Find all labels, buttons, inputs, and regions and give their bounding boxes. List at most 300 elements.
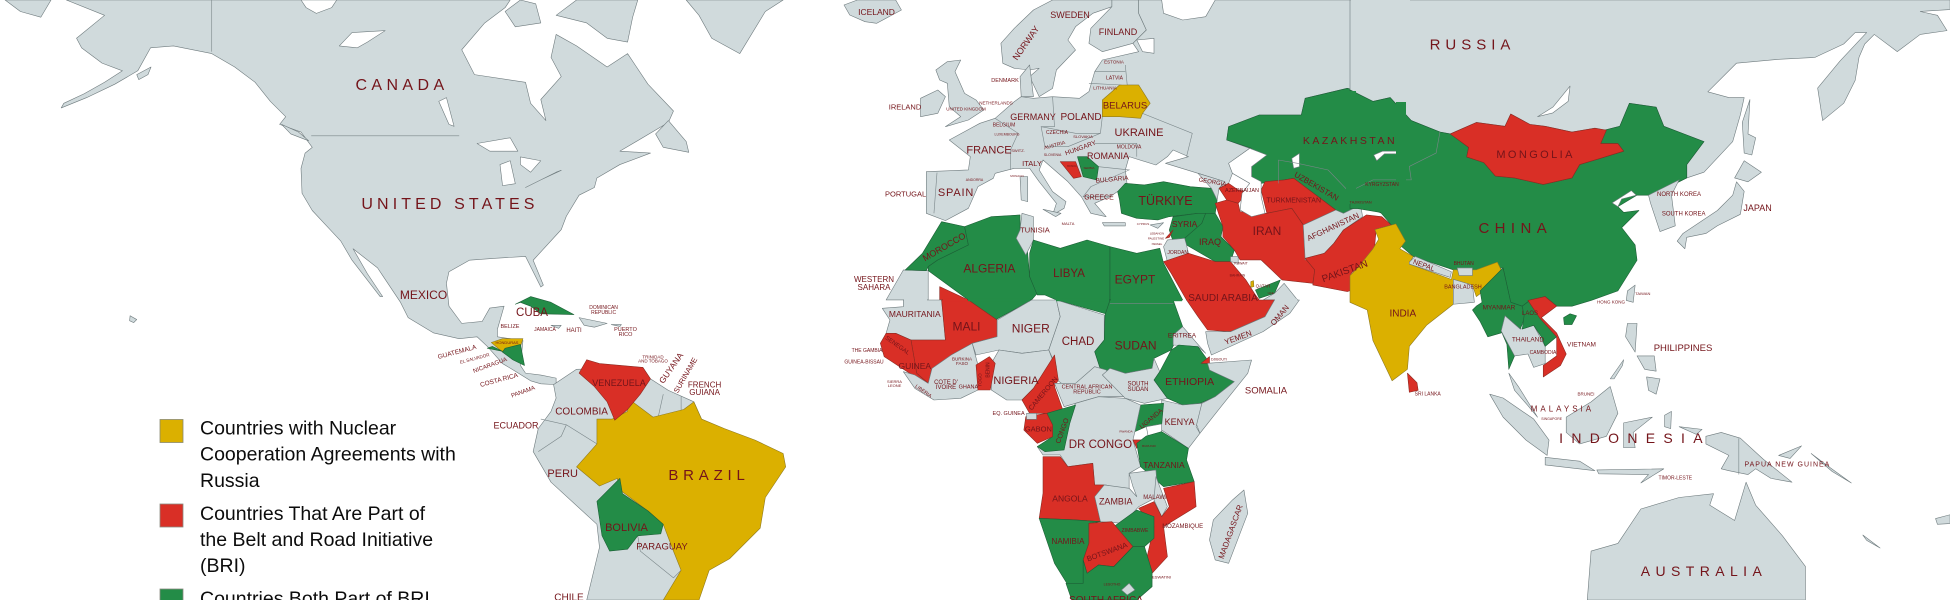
labels: Europe and Middle East: PALESTINE (1148, 236, 1164, 240)
labels: Asia and Oceania: SINGAPORE (1541, 417, 1563, 421)
island: Sicily (1043, 209, 1061, 217)
country: Mali (911, 300, 997, 383)
peninsula: Malaysia (1509, 373, 1538, 417)
labels: Europe and Middle East: DENMARK (991, 78, 1019, 84)
labels: Asia and Oceania: INDIA (1389, 309, 1416, 320)
labels: Europe and Middle East: NORWAY (1011, 24, 1041, 62)
labels: Asia and Oceania: BRUNEI (1577, 391, 1595, 396)
country: Algeria south (968, 300, 1032, 320)
labels: Europe and Middle East: ANDORRA (966, 178, 984, 182)
labels: Americas: BOLIVIA (605, 522, 649, 534)
landmass: mainland Europe and western Russia (926, 0, 1400, 221)
labels: Europe and Middle East: LIBYA (1053, 268, 1085, 280)
labels: Asia and Oceania: NORTH KOREA (1657, 192, 1701, 198)
country: Djibouti (1201, 357, 1209, 363)
country: Bhutan (1457, 268, 1472, 276)
borders: central Europe (1041, 97, 1192, 157)
labels: Africa: DJIBOUTI (1211, 358, 1227, 362)
country: Zambia (1095, 470, 1158, 523)
border: Ecuador Peru (538, 419, 566, 452)
country: Saudi Arabia south (1187, 300, 1275, 332)
labels: Africa: CENTRAL AFRICAN (1062, 385, 1112, 391)
labels: Africa: THE GAMBIA (852, 348, 883, 354)
island: Sardinia (1020, 177, 1028, 202)
border: Lithuania (1089, 83, 1121, 85)
labels: Africa: TOGO (978, 373, 983, 387)
labels: Africa: DR CONGO (1069, 439, 1132, 451)
labels: Americas: ECUADOR (493, 421, 539, 431)
labels: Americas: MEXICO (400, 288, 447, 302)
country: Cuba (515, 297, 574, 315)
labels: Europe and Middle East: IRAN (1253, 224, 1281, 238)
labels: Asia and Oceania: PAPUA NEW GUINEA (1744, 461, 1830, 468)
island: Vancouver (282, 124, 309, 141)
labels: Europe and Middle East: MALTA (1062, 221, 1075, 226)
island: Cyprus (1150, 223, 1164, 228)
labels: Europe and Middle East: KYRGYZSTAN (1365, 182, 1399, 188)
labels: Americas: GUATEMALA (437, 344, 478, 361)
labels: Africa: BURUNDI (1142, 444, 1156, 448)
country: Lesotho (1121, 583, 1135, 595)
country: Zimbabwe (1114, 510, 1154, 547)
map: Sub-Saharan Africa (880, 300, 1299, 600)
landmass: Chukotka fragment (5, 0, 51, 17)
lake: Balkhash (1374, 151, 1404, 161)
labels: Europe and Middle East: KAZAKHSTAN (1303, 135, 1397, 147)
labels: Americas: REPUBLIC (591, 310, 616, 316)
labels: Africa: CONGO (1055, 417, 1071, 445)
labels: Europe and Middle East: TUNISIA (1020, 226, 1050, 235)
island: Borneo (1566, 387, 1618, 444)
labels: Asia and Oceania (1389, 36, 1830, 579)
labels: Europe and Middle East (854, 7, 1399, 304)
islands: Visayas (1637, 356, 1656, 371)
island: Mindanao (1647, 377, 1660, 394)
island: Sakhalin (1742, 100, 1756, 155)
labels: Americas: EL SALVADOR (459, 352, 491, 365)
border: Kazakhstan China (1350, 132, 1440, 191)
island: Lesser Sunda (1597, 469, 1664, 483)
labels: Africa: SIERRA (887, 379, 902, 384)
labels: Europe and Middle East: IRELAND (889, 102, 922, 111)
labels: Europe and Middle East: GEORGIA (1198, 177, 1227, 188)
country: Pakistan (1305, 215, 1393, 292)
labels: Africa: BOTSWANA (1085, 540, 1129, 563)
labels: Europe and Middle East: BULGARIA (1095, 175, 1129, 185)
island: Solomon chain (1811, 453, 1851, 483)
island: Sumatra (1490, 394, 1549, 455)
map: Asia and Oceania (1350, 0, 1950, 600)
country: Uganda (1135, 403, 1164, 432)
labels: Americas: CUBA (516, 307, 548, 319)
country: Libya (1030, 240, 1110, 300)
labels: Europe and Middle East: ALGERIA (963, 261, 1015, 275)
legend item: nuclear cooperation: Countries with Nuclear (200, 418, 397, 440)
borders: Romania and Ukraine (1095, 143, 1137, 157)
country: UAE (1255, 280, 1280, 298)
labels: Asia and Oceania: AUSTRALIA (1641, 563, 1767, 579)
sea inlet: Arctic channel (301, 0, 337, 13)
country: Bangladesh (1453, 279, 1474, 304)
country: Tanzania (1137, 432, 1194, 487)
labels: Americas: NICARAGUA (473, 357, 508, 375)
labels: Africa: GABON (1025, 424, 1052, 433)
country: Iran (1215, 200, 1315, 283)
country: Malawi (1154, 477, 1167, 517)
labels: Americas: HONDURAS (496, 340, 519, 345)
labels: Asia and Oceania: SRI LANKA (1415, 392, 1441, 398)
labels: Europe and Middle East: ROMANIA (1087, 151, 1129, 161)
labels: Europe and Middle East: ISRAEL (1152, 242, 1163, 246)
labels: Americas: GUIANA (689, 388, 721, 397)
labels: Europe and Middle East: SWEDEN (1050, 10, 1090, 20)
country labels (355, 7, 1830, 600)
labels: Americas: TRINIDAD (642, 354, 664, 360)
labels: Asia and Oceania: THAILAND (1512, 336, 1544, 343)
island: Sulawesi (1624, 417, 1652, 448)
labels: Africa: SENEGAL (884, 335, 911, 357)
labels: Europe and Middle East: MONACO (1010, 174, 1024, 178)
labels: Asia and Oceania: HONG KONG (1597, 300, 1625, 305)
labels: Africa: IVOIRE (936, 385, 956, 391)
labels: Europe and Middle East: UNITED KINGDOM (946, 107, 986, 112)
country: Morocco (905, 222, 968, 271)
labels: Americas: RICO (619, 332, 633, 338)
labels: Americas: JAMAICA (534, 327, 556, 333)
island: Taiwan (1626, 285, 1635, 302)
labels: Africa: LESOTHO (1104, 582, 1121, 586)
labels: Asia and Oceania: PHILIPPINES (1654, 343, 1712, 354)
country: Oman north (1263, 283, 1298, 300)
country: Myanmar peninsula (1501, 331, 1515, 369)
labels: Asia and Oceania: BANGLADESH (1444, 284, 1482, 290)
lake: Huron (520, 157, 541, 172)
labels: Europe and Middle East: SLOVAKIA (1073, 134, 1093, 139)
labels: Africa: NIGER (1012, 322, 1050, 336)
country: North and South Korea (1649, 180, 1679, 232)
legend item: nuclear cooperation: Cooperation Agreements with (200, 444, 456, 466)
labels: Africa: BURKINA (952, 357, 972, 362)
labels: Africa: MADAGASCAR (1217, 503, 1245, 560)
island: Hokkaido (1735, 161, 1761, 182)
labels: Europe and Middle East: SLOVENIA (1044, 153, 1062, 157)
labels: Africa: SOMALIA (1245, 385, 1288, 396)
labels: Africa: MAURITANIA (889, 309, 941, 319)
labels: Americas: VENEZUELA (592, 378, 646, 388)
country: India (1350, 224, 1501, 381)
country: Ethiopia (1154, 345, 1234, 405)
labels: Europe and Middle East: BELGIUM (993, 122, 1015, 128)
lake: Ladoga (1137, 38, 1154, 53)
labels: Europe and Middle East: UKRAINE (1115, 127, 1163, 139)
island: Ireland (921, 90, 945, 117)
country: Norway and Sweden (1001, 0, 1112, 97)
labels: Americas: BRAZIL (668, 467, 750, 484)
landmass: Greenland (686, 0, 783, 54)
country: Nicaragua (503, 344, 524, 365)
labels: Americas: PARAGUAY (636, 542, 688, 552)
labels: Africa: GHANA (959, 385, 979, 391)
legend item: nuclear cooperation (160, 418, 456, 492)
island: Jamaica (551, 325, 561, 328)
labels: Africa: OMAN (1269, 303, 1291, 327)
labels: Europe and Middle East: AUSTRIA (1043, 140, 1067, 151)
labels: Africa: YEMEN (1223, 329, 1253, 347)
labels: Americas: PERU (547, 468, 578, 480)
labels: Europe and Middle East: HUNGARY (1064, 139, 1098, 157)
labels: Africa (844, 303, 1291, 600)
labels: Americas: BELIZE (501, 324, 520, 330)
country: Jordan and Levant (1164, 238, 1188, 262)
labels: Europe and Middle East: JORDAN (1167, 250, 1188, 256)
labels: Africa: ZAMBIA (1099, 496, 1132, 506)
labels: Asia and Oceania: JAPAN (1743, 203, 1772, 213)
island: New Caledonia (1863, 535, 1880, 548)
labels: Asia and Oceania: LAOS (1522, 311, 1538, 317)
labels: Americas: DOMINICAN (589, 305, 618, 311)
border: Kazakhstan south (1277, 160, 1279, 183)
labels: Africa: FASO (956, 361, 968, 366)
labels: Europe and Middle East: SYRIA (1172, 219, 1198, 229)
border: Paraguay (638, 536, 681, 578)
legend item: belt and road: (BRI) (200, 555, 246, 577)
country: Honduras (491, 339, 523, 352)
country: Central African Republic (1054, 367, 1125, 407)
country: West African coast (903, 343, 978, 400)
country: Iraq (1185, 213, 1234, 262)
country: Serbia (1077, 157, 1099, 180)
labels: Americas (355, 77, 750, 600)
labels: Europe and Middle East: AZERBAIJAN (1225, 188, 1259, 194)
country: Angola (1039, 457, 1104, 522)
border: Egypt Sudan (1110, 302, 1173, 304)
labels: Europe and Middle East: KUWAIT (1234, 261, 1249, 265)
labels: Europe and Middle East: ESTONIA (1104, 60, 1124, 65)
labels: Europe and Middle East: CYPRUS (1137, 222, 1149, 226)
country: Namibia (1039, 518, 1100, 585)
border: Guyana Suriname (658, 394, 663, 417)
labels: Europe and Middle East: BOSNIA (1067, 165, 1077, 168)
country: Burundi (1133, 440, 1141, 448)
country: DR Congo (1037, 397, 1141, 497)
country: China and Kazakhstan (1350, 90, 1704, 306)
lake: Great Bear (339, 31, 385, 48)
island: Palawan (1610, 360, 1624, 379)
legend item: nuclear cooperation: Russia (200, 470, 260, 492)
labels: Americas: FRENCH (688, 380, 721, 390)
labels: Asia and Oceania: CHINA (1478, 220, 1552, 237)
labels: Americas: HAITI (566, 328, 582, 334)
island: Seram (1679, 427, 1702, 434)
lake: Victoria (1146, 424, 1162, 437)
landmass: Newfoundland (656, 121, 689, 152)
country: Brazil (577, 398, 786, 600)
labels: Asia and Oceania: MONGOLIA (1496, 149, 1575, 161)
country: Azerbaijan (1219, 183, 1248, 203)
country: Nepal (1409, 256, 1451, 277)
labels: Africa: ESWATINI (1152, 575, 1171, 580)
labels: Africa: CAMEROON (1028, 376, 1060, 412)
country: Egypt (1110, 247, 1183, 300)
labels: Americas: COSTA RICA (479, 372, 519, 389)
labels: Africa: TANZANIA (1143, 460, 1185, 470)
labels: Americas: SURINAME (672, 356, 699, 395)
sea: Aral (1292, 153, 1299, 168)
labels: Europe and Middle East: ITALY (1022, 159, 1042, 168)
island: Puerto Rico (611, 325, 621, 326)
labels: Africa: KENYA (1165, 417, 1195, 427)
island: Halmahera (1665, 411, 1671, 429)
labels: Europe and Middle East: GERMANY (1010, 112, 1056, 122)
country: Western Sahara (886, 270, 928, 300)
country: Syria (1169, 213, 1206, 242)
labels: Europe and Middle East: GREECE (1084, 194, 1114, 202)
labels: Europe and Middle East: TÜRKIYE (1138, 194, 1193, 208)
legend item: belt and road: Countries That Are Part of (200, 503, 426, 525)
labels: Americas: COLOMBIA (555, 406, 608, 418)
country: Eritrea (1173, 327, 1206, 353)
country: Mali north (940, 287, 968, 300)
labels: Europe and Middle East: LEBANON (1150, 232, 1164, 236)
border: Spain Portugal (934, 173, 937, 213)
country: Afghanistan (1303, 205, 1363, 260)
country: Bosnia (1060, 162, 1081, 178)
country: Tunisia (1016, 213, 1033, 255)
labels: Asia and Oceania: RUSSIA (1430, 36, 1515, 54)
island: Britain (936, 60, 984, 127)
labels: Americas: CANADA (355, 77, 449, 94)
island: Hainan (1564, 314, 1577, 325)
labels: Europe and Middle East: EGYPT (1115, 272, 1156, 286)
labels: Americas: PANAMA (511, 385, 536, 400)
country: Mauritania (882, 300, 945, 340)
labels: Africa: MOZAMBIQUE (1162, 524, 1203, 530)
labels: Asia and Oceania: MALAYSIA (1531, 405, 1594, 414)
country: Lebanon (1165, 230, 1173, 238)
labels: Africa: MALI (952, 319, 981, 333)
labels: Africa: ERITREA (1168, 332, 1197, 339)
labels: Europe and Middle East: ICELAND (858, 7, 895, 17)
country: Laos (1522, 300, 1557, 346)
country: Yemen and Oman (1206, 300, 1299, 355)
borders: Baltic states (1095, 71, 1125, 73)
labels: Americas: UNITED STATES (361, 196, 539, 213)
labels: Africa: EQ. GUINEA (993, 411, 1025, 417)
labels: Africa: NAMIBIA (1052, 537, 1085, 546)
landmass: Arctic island (505, 0, 541, 27)
labels: Europe and Middle East: IRAQ (1199, 237, 1221, 247)
labels: Africa: SUDAN (1115, 339, 1157, 353)
labels: Africa: LEONE (888, 383, 902, 388)
labels: Europe and Middle East: TURKMENISTAN (1266, 198, 1321, 204)
labels: Americas: GUYANA (657, 350, 685, 385)
seam patches: unify map tiles (904, 0, 1410, 301)
country: Myanmar (1472, 268, 1526, 337)
island: Kodiak (137, 67, 151, 80)
legend (160, 418, 456, 600)
island: New Guinea (1706, 432, 1792, 482)
country: Senegal and Guinea (880, 333, 928, 383)
map: Americas (5, 0, 786, 600)
labels: Europe and Middle East: SAHARA (858, 283, 891, 292)
labels: Europe and Middle East: FINLAND (1099, 27, 1138, 37)
country: South Africa (1066, 547, 1152, 600)
country: Turkiye (1118, 182, 1217, 220)
labels: Europe and Middle East: TAJIKISTAN (1350, 200, 1372, 204)
labels: Africa: NIGERIA (993, 375, 1039, 387)
labels: Europe and Middle East: SERBIA (1083, 166, 1095, 170)
labels: Africa: COTE D' (934, 380, 958, 386)
labels: Africa: GUINEA (899, 361, 931, 371)
labels: Europe and Middle East: PAKISTAN (1321, 258, 1369, 285)
country: Sri Lanka (1407, 373, 1418, 392)
country: Vietnam (1528, 297, 1566, 377)
country: Kenya (1162, 400, 1202, 448)
labels: Africa: ANGOLA (1052, 494, 1088, 504)
labels: Europe and Middle East: LITHUANIA (1093, 85, 1117, 90)
country: Libya south (1056, 300, 1110, 315)
labels: Africa: CHAD (1062, 336, 1094, 348)
labels: Asia and Oceania: TIMOR-LESTE (1658, 475, 1693, 481)
country: Finland (1089, 0, 1146, 52)
island: New Zealand fragment (1936, 515, 1950, 524)
island: Honshu and Kyushu (1677, 182, 1744, 249)
country: Turkmenistan (1261, 178, 1336, 225)
country: Cameroon (1022, 355, 1064, 413)
country: Congo (1037, 405, 1076, 452)
island: Luzon (1626, 323, 1637, 352)
lake: Balkhash (1374, 150, 1400, 162)
labels: Europe and Middle East: BAHRAIN (1230, 273, 1246, 277)
border: Balkans (1083, 167, 1129, 197)
labels: Europe and Middle East: LATVIA (1106, 76, 1124, 82)
labels: Asia and Oceania: CAMBODIA (1530, 350, 1557, 356)
country: Bolivia (597, 478, 663, 551)
sea: Caspian (1229, 148, 1267, 217)
labels: Europe and Middle East: AFGHANISTAN (1306, 211, 1361, 243)
labels: Asia and Oceania: MYANMAR (1483, 305, 1516, 312)
labels: Asia and Oceania: NEPAL (1412, 259, 1435, 273)
landmass: Baffin and Arctic islands (556, 0, 638, 42)
gulf: Bohai (1612, 191, 1636, 207)
labels: Europe and Middle East: POLAND (1060, 112, 1102, 123)
country: Algeria (928, 215, 1037, 300)
country: Denmark (1020, 65, 1033, 97)
country: Russia (1350, 0, 1950, 178)
country: Venezuela (579, 360, 651, 420)
borders: France and Germany (995, 118, 1018, 170)
border: Canada United States (311, 135, 459, 137)
country: Equatorial Guinea (1027, 413, 1037, 419)
island: New Britain (1779, 446, 1802, 458)
border: Russia Baltics (1125, 65, 1139, 85)
country: Botswana (1083, 522, 1133, 573)
labels: Europe and Middle East: MOLDOVA (1117, 144, 1142, 150)
border: Alaska Canada (211, 0, 213, 52)
country: Nigeria (991, 350, 1056, 400)
map: Europe, Middle East and North Africa (844, 0, 1400, 300)
country: Mongolia (1450, 114, 1624, 184)
labels: Europe and Middle East: QATAR (1256, 283, 1271, 288)
labels: Europe and Middle East: WESTERN (854, 275, 894, 284)
labels: Asia and Oceania: VIETNAM (1567, 342, 1596, 349)
labels: Americas: PUERTO (614, 327, 638, 333)
labels: Europe and Middle East: SAUDI ARABIA (1188, 293, 1258, 304)
border: Czechia Slovakia (1041, 127, 1100, 133)
labels: Europe and Middle East: BELARUS (1103, 100, 1147, 111)
labels: Europe and Middle East: SWITZ. (1011, 148, 1025, 153)
lake: Erie and Ontario (526, 170, 561, 188)
